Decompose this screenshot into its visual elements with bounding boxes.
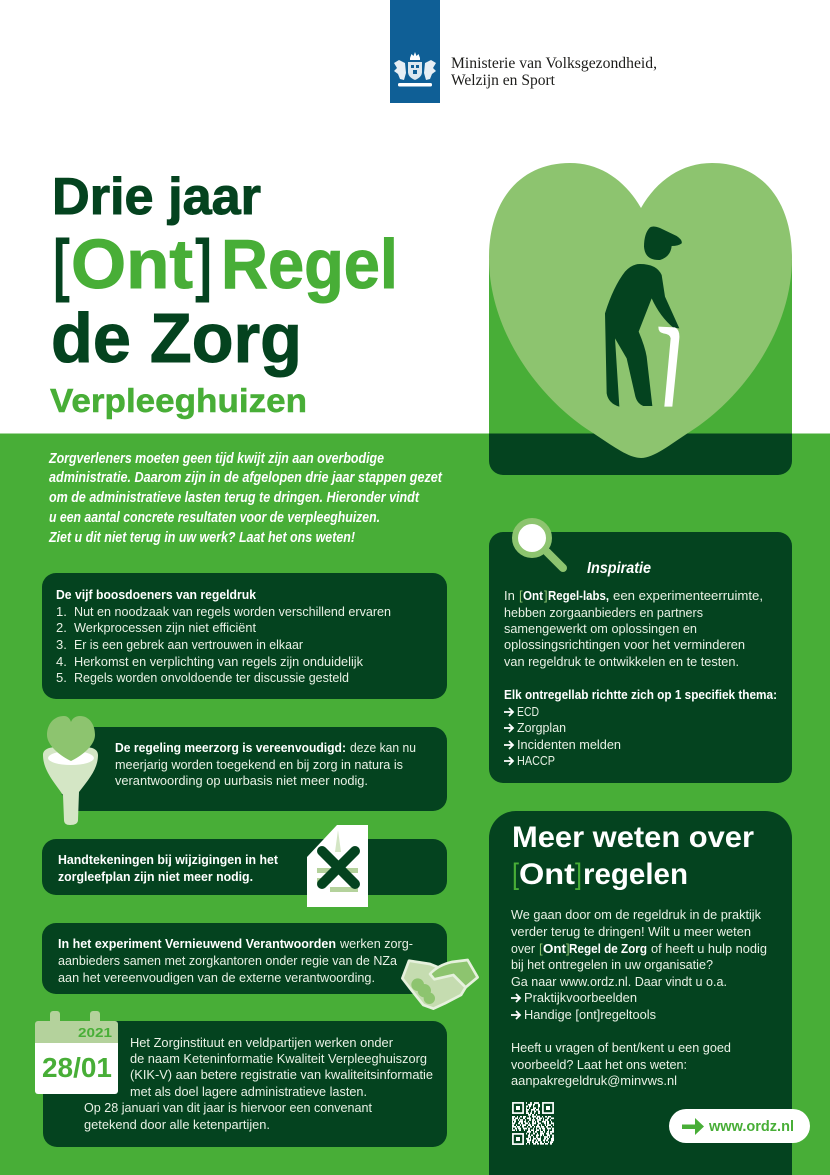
panel heading: Inspiratie bbox=[587, 560, 651, 577]
theme list: Incidenten melden bbox=[517, 737, 621, 752]
ministry name: Ministerie van Volksgezondheid, bbox=[451, 55, 657, 72]
panel text: de naam Keteninformatie Kwaliteit Verpleeghuiszorg bbox=[130, 1051, 427, 1066]
panel text: Ont bbox=[543, 941, 567, 956]
panel text: met als doel lagere administratieve lasten. bbox=[130, 1084, 367, 1099]
calendar year: 2021 bbox=[78, 1025, 112, 1040]
panel: inspiratie bbox=[489, 521, 792, 783]
theme heading: Elk ontregellab richtte zich op 1 specifiek thema: bbox=[504, 687, 777, 702]
panel text: meerjarig worden toegekend en bij zorg in natura is bbox=[115, 757, 403, 772]
numbered list: 3. bbox=[56, 637, 67, 652]
panel text: Op 28 januari van dit jaar is hiervoor een convenant bbox=[84, 1100, 372, 1115]
logo: Rijksoverheid bbox=[390, 0, 657, 103]
panel heading: De vijf boosdoeners van regeldruk bbox=[56, 587, 257, 602]
title: de Zorg bbox=[51, 299, 302, 377]
intro text: om de administratieve lasten terug te dringen. Hieronder vindt bbox=[49, 489, 420, 506]
theme list: HACCP bbox=[517, 753, 555, 768]
panel text: Heeft u vragen of bent/kent u een goed bbox=[511, 1040, 731, 1055]
icon: crossed-out document bbox=[307, 825, 368, 907]
title: ] bbox=[195, 225, 212, 303]
panel text bbox=[58, 852, 279, 884]
panel text: voorbeeld? Laat het ons weten: bbox=[511, 1057, 687, 1072]
title: Drie jaar bbox=[52, 168, 261, 226]
hero: heart with elderly person bbox=[489, 163, 792, 475]
panel text: [ bbox=[519, 588, 523, 603]
calendar date: 28/01 bbox=[42, 1052, 112, 1083]
panel heading: [ bbox=[512, 858, 520, 891]
panel: regeling meerzorg bbox=[43, 716, 447, 825]
panel text bbox=[58, 936, 413, 985]
intro text: Ziet u dit niet terug in uw werk? Laat het ons weten! bbox=[48, 529, 355, 546]
numbered list: 4. bbox=[56, 654, 67, 669]
panel heading: ] bbox=[575, 858, 582, 891]
title bbox=[50, 168, 398, 419]
link pill: www.ordz.nl bbox=[669, 1109, 810, 1143]
title: [ bbox=[53, 225, 70, 303]
intro text bbox=[48, 450, 443, 546]
numbered list: 1. bbox=[56, 604, 67, 619]
icon: heart bbox=[489, 163, 792, 458]
QR code bbox=[512, 1102, 554, 1145]
panel text: aanpakregeldruk@minvws.nl bbox=[511, 1073, 677, 1088]
panel text: De regeling meerzorg is vereenvoudigd: bbox=[115, 740, 346, 755]
panel text: Regel de Zorg bbox=[569, 941, 647, 956]
panel text: Het Zorginstituut en veldpartijen werken onder bbox=[130, 1035, 394, 1050]
panel: meer weten bbox=[489, 811, 792, 1175]
panel text: of heeft u hulp nodig bbox=[651, 941, 767, 956]
link text: www.ordz.nl bbox=[708, 1118, 794, 1135]
numbered list: 5. bbox=[56, 670, 67, 685]
panel text: zorgleefplan zijn niet meer nodig. bbox=[58, 869, 253, 884]
panel text: ] bbox=[566, 941, 570, 956]
intro text: Zorgverleners moeten geen tijd kwijt zijn aan overbodige bbox=[48, 450, 384, 467]
panel text: We gaan door om de regeldruk in de praktijk bbox=[511, 907, 761, 922]
panel text: Ga naar www.ordz.nl. Daar vindt u o.a. bbox=[511, 974, 727, 989]
panel: vernieuwend verantwoorden bbox=[42, 923, 478, 1009]
panel heading bbox=[512, 821, 754, 891]
panel text: verantwoording op uurbasis niet meer nodig. bbox=[115, 773, 368, 788]
panel text: van regeldruk te ontwikkelen en te testen. bbox=[504, 654, 739, 669]
icon: heart in funnel bbox=[43, 716, 98, 825]
panel heading: regelen bbox=[583, 858, 688, 891]
theme list: ECD bbox=[517, 704, 539, 719]
panel text: verder terug te dringen! Wilt u meer weten bbox=[511, 924, 751, 939]
ministry name: Welzijn en Sport bbox=[451, 72, 556, 89]
panel text: ] bbox=[544, 588, 548, 603]
panel text: bij het ontregelen in uw organisatie? bbox=[511, 957, 713, 972]
panel text: hebben zorgaanbieders en partners bbox=[504, 605, 703, 620]
icon: handshake bbox=[402, 960, 478, 1009]
panel: handtekeningen bbox=[42, 825, 447, 907]
panel text: getekend door alle ketenpartijen. bbox=[84, 1117, 270, 1132]
panel text: samengewerkt om oplossingen en bbox=[504, 621, 697, 636]
numbered list: Regels worden onvoldoende ter discussie gesteld bbox=[74, 670, 349, 685]
panel text: Handtekeningen bij wijzigingen in het bbox=[58, 852, 279, 867]
panel text bbox=[504, 588, 763, 669]
panel text: over bbox=[511, 941, 536, 956]
numbered list: Werkprocessen zijn niet efficiënt bbox=[74, 620, 256, 635]
panel heading: Ont bbox=[519, 858, 575, 891]
panel text: oplossingsrichtingen voor het verminderen bbox=[504, 637, 745, 652]
panel text: werken zorg- bbox=[339, 936, 413, 951]
numbered list: Herkomst en verplichting van regels zijn onduidelijk bbox=[74, 654, 363, 669]
panel text: Praktijkvoorbeelden bbox=[524, 990, 637, 1005]
panel text: Regel-labs, bbox=[548, 588, 609, 603]
panel text: aanbieders samen met zorgkantoren onder regie van de NZa bbox=[58, 953, 398, 968]
title: Verpleeghuizen bbox=[50, 382, 307, 419]
theme list: Zorgplan bbox=[517, 720, 566, 735]
numbered list: Er is een gebrek aan vertrouwen in elkaar bbox=[74, 637, 304, 652]
panel heading: Meer weten over bbox=[512, 821, 754, 854]
panel: keteninformatie kwaliteit bbox=[35, 1011, 447, 1147]
panel text: [ bbox=[539, 941, 543, 956]
icon: elderly person with cane bbox=[605, 226, 682, 407]
numbered list: 2. bbox=[56, 620, 67, 635]
panel text: In bbox=[504, 588, 515, 603]
icon: arrow bbox=[682, 1118, 704, 1135]
green background bbox=[0, 434, 830, 1175]
panel text: aan het vereenvoudigen van de externe verantwoording. bbox=[58, 970, 375, 985]
numbered list bbox=[56, 604, 391, 685]
panel text: In het experiment Vernieuwend Verantwoorden bbox=[58, 936, 336, 951]
panel text bbox=[511, 907, 767, 1088]
title: Ont bbox=[71, 225, 193, 303]
panel: de vijf boosdoeners bbox=[42, 573, 447, 699]
ministry name bbox=[451, 55, 657, 89]
panel text bbox=[84, 1035, 433, 1132]
icon: calendar bbox=[35, 1011, 118, 1094]
icon: magnifying glass bbox=[515, 521, 563, 568]
numbered list: Nut en noodzaak van regels worden verschillend ervaren bbox=[74, 604, 391, 619]
panel text bbox=[115, 740, 416, 788]
title: Regel bbox=[221, 225, 398, 303]
logo ribbon with crest bbox=[390, 0, 440, 103]
panel text: een experimenteerruimte, bbox=[613, 588, 763, 603]
intro text: administratie. Daarom zijn in de afgelopen drie jaar stappen gezet bbox=[49, 469, 443, 486]
panel text: Handige [ont]regeltools bbox=[524, 1007, 656, 1022]
panel text: (KIK-V) aan betere registratie van kwaliteitsinformatie bbox=[130, 1067, 433, 1082]
panel text: Ont bbox=[523, 588, 544, 603]
panel text: deze kan nu bbox=[350, 740, 416, 755]
intro text: u een aantal concrete resultaten voor de verpleeghuizen. bbox=[49, 509, 380, 526]
theme list bbox=[504, 704, 621, 768]
